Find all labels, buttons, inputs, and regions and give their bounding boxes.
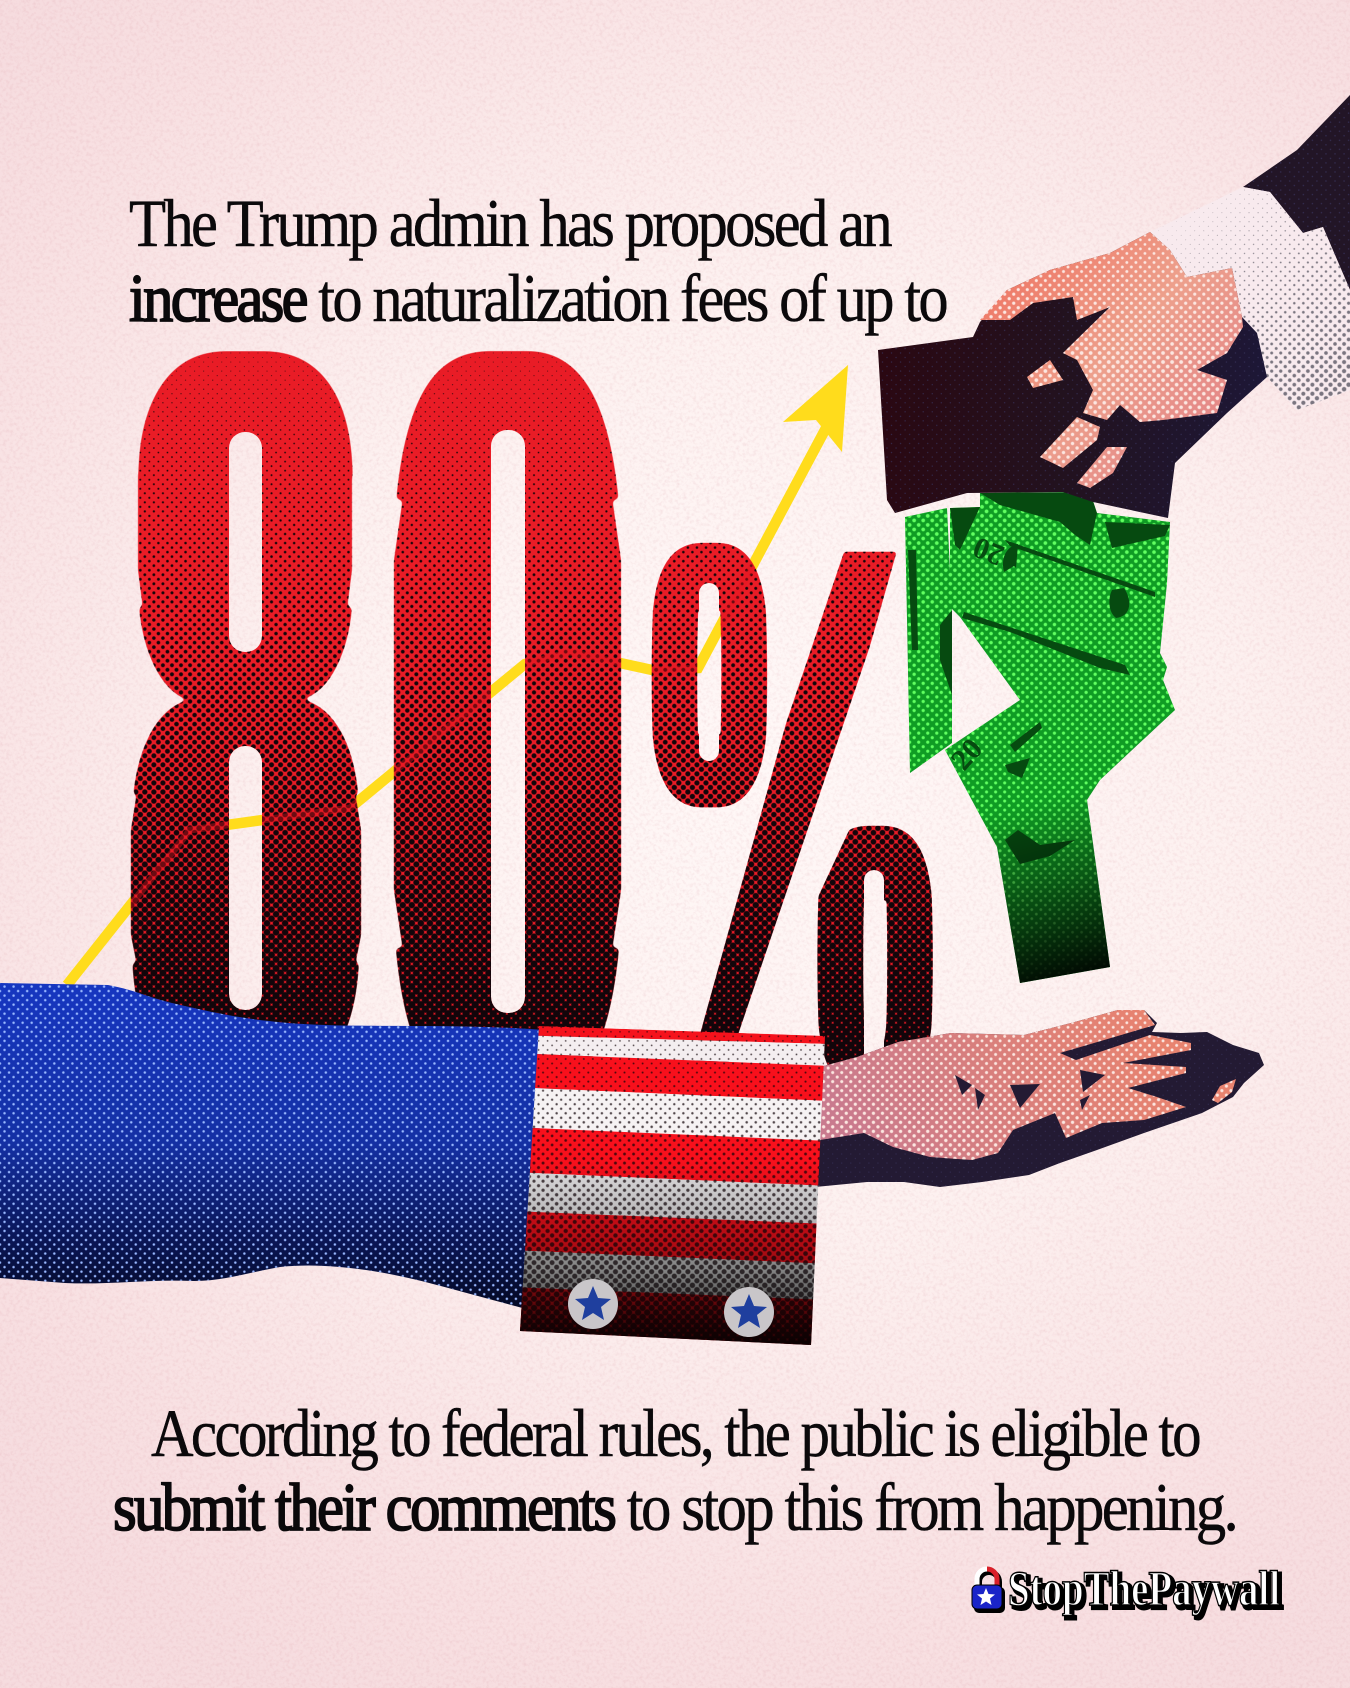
stripes — [510, 1025, 830, 1350]
cuff button right — [724, 1287, 774, 1337]
big number 80% — [67, 206, 965, 1415]
palm creases — [955, 1070, 1105, 1110]
heading line 1: The Trump admin has proposed an — [129, 185, 892, 261]
shirt cuff — [1145, 180, 1350, 415]
digits 80 — [130, 350, 622, 1090]
heading text — [129, 185, 947, 336]
arrow: rising yellow trend line — [67, 365, 848, 985]
hand shadow — [810, 1005, 1270, 1190]
upper hand holding money — [870, 90, 1350, 520]
logo wordmark: StopThePaywall — [1008, 1560, 1280, 1616]
cuff halftone — [510, 1020, 830, 1350]
logo: StopThePaywall — [972, 1560, 1283, 1619]
dark shadow of hand — [870, 225, 1270, 520]
heading line 2: increase to naturalization fees of up to — [129, 260, 947, 336]
money: falling twenty-dollar bills: 20 — [945, 732, 989, 777]
body line 1: According to federal rules, the public is eligible to — [151, 1395, 1200, 1471]
lit skin of hand — [815, 1005, 1245, 1165]
suit sleeve — [1243, 95, 1350, 290]
lower open hand — [810, 1005, 1270, 1190]
bill details — [908, 492, 1170, 864]
lit skin of hand — [970, 225, 1250, 490]
percent sign: % — [652, 451, 910, 942]
body line 2: submit their comments to stop this from happening. — [113, 1469, 1236, 1545]
money: falling twenty-dollar bills — [905, 492, 1175, 983]
bottom call to action text — [113, 1395, 1236, 1545]
blue suit sleeve — [0, 980, 550, 1315]
icon: padlock — [972, 1569, 1005, 1613]
bill value marks: 20 — [968, 530, 1009, 572]
percent sign — [652, 542, 933, 1096]
cuff button left — [568, 1279, 618, 1329]
digits 80: 0 — [396, 217, 620, 943]
striped flag cuff — [510, 1020, 830, 1350]
digits 80: 8 — [139, 206, 352, 989]
halftone shading on number — [130, 352, 933, 1096]
